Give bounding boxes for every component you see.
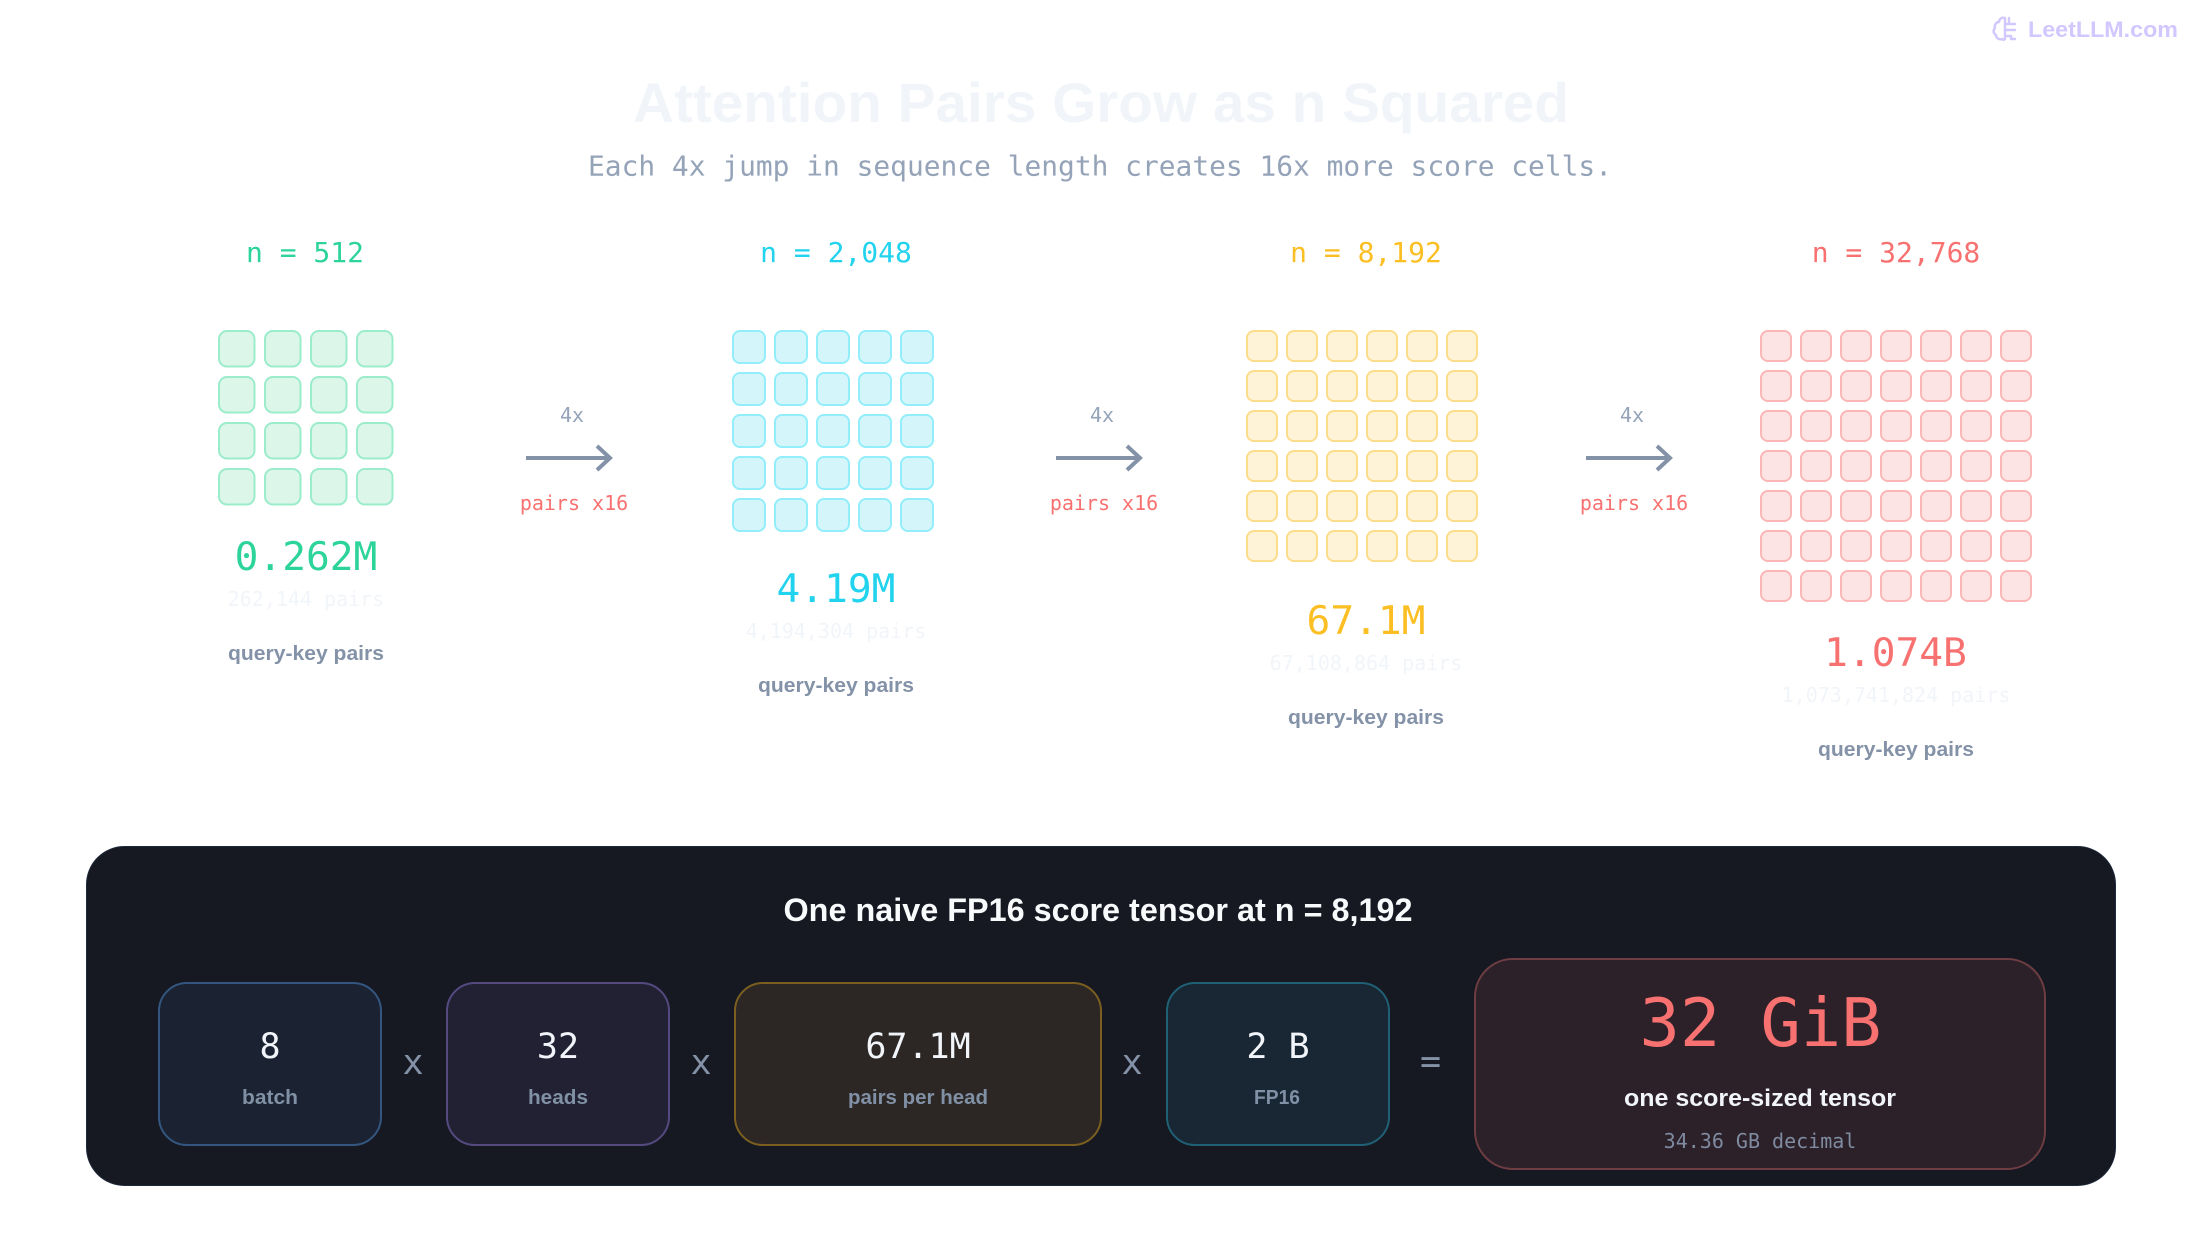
factor: heads — [447, 983, 669, 1145]
scale label: 4x — [1620, 403, 1644, 427]
growth label: pairs x16 — [1050, 491, 1158, 515]
arrow: 2,048 to 8,192 — [1050, 403, 1158, 515]
arrow shape — [1056, 446, 1140, 470]
value: 8 — [259, 1027, 281, 1067]
arrow: 512 to 2,048 — [520, 403, 628, 515]
box — [159, 983, 381, 1145]
grid: 6 by 6 cells — [1247, 331, 1477, 561]
label: pairs per head — [848, 1087, 988, 1109]
value: 4.19M — [777, 566, 895, 612]
value: 32 GiB — [1639, 984, 1882, 1062]
panel: FP16 score tensor calculation — [86, 846, 2116, 1186]
result: 32 GiB — [1475, 959, 2045, 1169]
value: 67.1M — [1307, 598, 1425, 644]
factor: batch — [159, 983, 381, 1145]
column: n = 2,048 — [733, 236, 933, 697]
value: 2 B — [1246, 1027, 1310, 1067]
label: batch — [242, 1087, 298, 1109]
sequence length label: n = 32,768 — [1812, 236, 1980, 269]
column: n = 32,768 — [1761, 236, 2031, 761]
scale label: 4x — [1090, 403, 1114, 427]
label: FP16 — [1254, 1087, 1300, 1109]
sequence length label: n = 8,192 — [1290, 236, 1442, 269]
column: n = 8,192 — [1247, 236, 1477, 729]
growth label: pairs x16 — [520, 491, 628, 515]
value: 67.1M — [865, 1027, 971, 1067]
factor: FP16 — [1167, 983, 1389, 1145]
exact pair count: 67,108,864 pairs — [1270, 651, 1462, 675]
column: n = 512 — [219, 236, 392, 665]
logo: LeetLLM.com — [1994, 17, 2178, 42]
box — [735, 983, 1101, 1145]
subtitle: Each 4x jump in sequence length creates 16x more score cells. — [588, 150, 1612, 182]
title: Attention Pairs Grow as n Squared — [633, 71, 1569, 134]
scale label: 4x — [560, 403, 584, 427]
exact pair count: 1,073,741,824 pairs — [1782, 683, 2010, 707]
box — [447, 983, 669, 1145]
arrow: 8,192 to 32,768 — [1580, 403, 1688, 515]
caption: query-key pairs — [228, 643, 384, 665]
sequence length label: n = 512 — [246, 236, 364, 269]
label: heads — [528, 1087, 588, 1109]
decimal note: 34.36 GB decimal — [1664, 1129, 1856, 1153]
growth label: pairs x16 — [1580, 491, 1688, 515]
arrow shape — [1586, 446, 1670, 470]
arrow shape — [526, 446, 610, 470]
factor: pairs per head — [735, 983, 1101, 1145]
value: 0.262M — [235, 534, 377, 580]
grid: 5 by 5 cells — [733, 331, 933, 531]
operator: equals: = — [1420, 1042, 1441, 1082]
caption: query-key pairs — [1818, 739, 1974, 761]
box — [1475, 959, 2045, 1169]
operator: multiply: x — [1121, 1043, 1143, 1083]
value: 1.074B — [1824, 630, 1967, 676]
operator: multiply: x — [402, 1043, 424, 1083]
exact pair count: 4,194,304 pairs — [746, 619, 926, 643]
value: 32 — [537, 1027, 579, 1067]
operator: multiply: x — [690, 1043, 712, 1083]
panel background — [86, 846, 2116, 1186]
exact pair count: 262,144 pairs — [228, 587, 384, 611]
box — [1167, 983, 1389, 1145]
caption: query-key pairs — [1288, 707, 1444, 729]
logo text: LeetLLM.com — [2028, 17, 2178, 42]
caption: query-key pairs — [758, 675, 914, 697]
icon: brain — [1994, 18, 2015, 40]
label: one score-sized tensor — [1624, 1085, 1896, 1112]
sequence length label: n = 2,048 — [760, 236, 912, 269]
panel heading: One naive FP16 score tensor at n = 8,192 — [784, 892, 1412, 928]
grid: 7 by 7 cells — [1761, 331, 2031, 601]
grid: 4 by 4 cells — [219, 331, 392, 504]
